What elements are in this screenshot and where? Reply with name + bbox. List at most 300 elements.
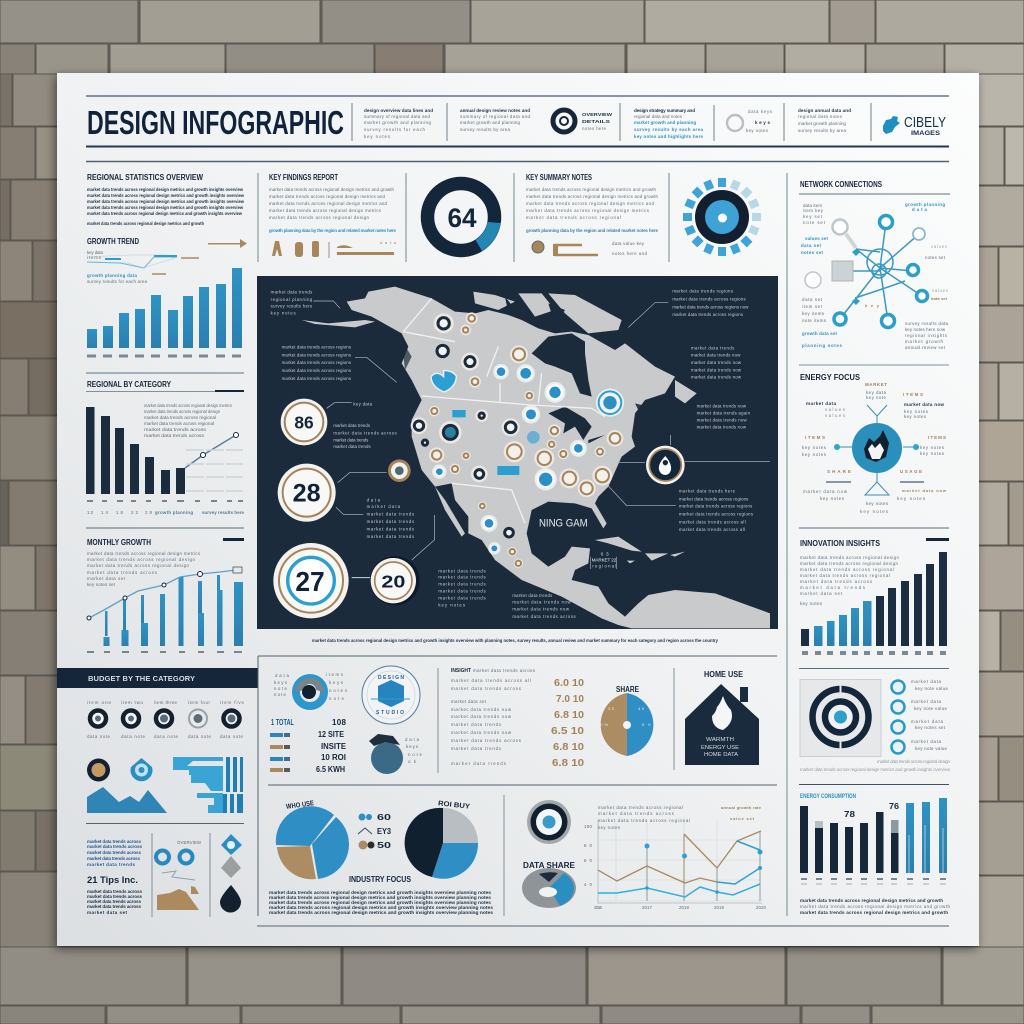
panel: lower left: OVERVIEW — [177, 840, 202, 845]
line chart: value set — [730, 816, 755, 821]
map text: caribbean label — [591, 551, 617, 569]
panel: lower left: market data trends across — [87, 844, 142, 849]
line chart: 2018 — [679, 905, 690, 910]
network labels: key items — [802, 311, 825, 316]
hub labels: key data — [866, 390, 887, 395]
network labels: note set — [803, 220, 826, 225]
panel: dark bar chart with trend: 22 — [131, 510, 139, 515]
lower text block: market data trends across regional design metrics and growth insights overview planning notes — [269, 900, 491, 905]
half pie — [596, 685, 658, 756]
icon: header target — [553, 110, 575, 132]
half pie: 30 — [608, 706, 615, 711]
chart scribble — [162, 871, 195, 880]
panel: dark bar chart with trend: market data trends across regional design metrics — [144, 403, 233, 408]
callout text top right: market data trends across regions — [672, 312, 743, 317]
panel: bottom right bars: market data trends across regional design metrics and growth — [800, 904, 951, 909]
panel: top text 2: growth planning data by the region and related market notes here — [526, 228, 659, 233]
ball icon: keys — [406, 744, 419, 749]
header text block 3: key notes and highlights here — [634, 134, 704, 139]
header text block 2: market growth and planning — [460, 120, 521, 125]
line chart: 2016 — [594, 905, 603, 910]
header text block 1: design overview data lines and — [364, 108, 433, 113]
panel: lower left: market data trends across — [87, 889, 142, 894]
panel: dark bar chart with trend: market data trends across — [144, 433, 205, 438]
panel: lower left: market data set — [87, 910, 127, 915]
pie legend: 50 — [377, 841, 392, 850]
panel: top text 1 — [258, 173, 406, 262]
header text block 4 — [798, 108, 851, 133]
callout text center left: market data — [367, 504, 401, 509]
map text: caribbean label: regional — [592, 563, 616, 568]
panel: dark bar chart with trend: market data trends across — [144, 427, 207, 432]
header text block 1: market growth and planning — [364, 120, 432, 125]
callout text top left: regional planning — [271, 297, 313, 302]
caption under map: market data trends across regional design metrics and growth insights overview with planning notes, survey results, annual review and market summary for each category and region across the country — [312, 638, 718, 644]
stamp badge: STUDIO — [376, 710, 404, 716]
callout text center left — [367, 497, 414, 539]
donut with labels: note — [274, 692, 287, 697]
panel: growth bars: INNOVATION INSIGHTS — [800, 539, 881, 548]
text column: market data trends across — [473, 668, 536, 673]
mini line chart: growth planning data — [87, 273, 138, 278]
logo — [883, 114, 946, 137]
donut with labels — [274, 672, 348, 706]
house icon — [685, 670, 759, 765]
panel: top text 2: KEY SUMMARY NOTES — [526, 173, 592, 182]
donut with labels: keys — [329, 680, 344, 685]
body text: market data trends across regional design metrics and growth — [87, 221, 204, 226]
bars — [800, 806, 898, 873]
stats table: 10 ROI — [321, 753, 346, 762]
hub labels: key note — [866, 395, 887, 400]
network labels: market growth — [905, 339, 944, 344]
panel: icon row: data note — [220, 734, 244, 739]
stat circle: 20 — [370, 556, 420, 605]
panel: icon row: item three — [154, 700, 178, 705]
panel: network diagram — [787, 173, 950, 916]
callout text bottom left: market data trends — [438, 575, 486, 580]
map badges: tan — [431, 315, 620, 566]
header text block 3: market growth and planning — [634, 120, 696, 125]
text column: INSIGHT — [451, 668, 472, 674]
lower text block: market data trends across regional design metrics and growth insights overview planning notes — [269, 905, 493, 910]
panel: dark bar chart with trend: growth planning — [155, 510, 193, 515]
map text: ocean label: NING GAM — [539, 518, 588, 530]
hub labels: market data now — [803, 489, 848, 494]
network labels: data set — [931, 296, 948, 301]
callout text bottom middle: market data trends across — [512, 614, 576, 619]
ball icon: data — [405, 737, 420, 742]
text column: market data set — [451, 699, 487, 704]
panel: growth bars: market data set — [800, 591, 843, 596]
house icon: ENERGY USE — [701, 745, 740, 751]
panel: dark bar chart with trend — [86, 373, 245, 515]
panel: top text 1: market data trends across regional design metrics — [269, 208, 382, 213]
panel: target — [799, 668, 951, 772]
hub labels: ITEMS — [805, 435, 825, 440]
header text block 4: design annual data and — [798, 108, 851, 113]
map marker: blue shield — [431, 371, 456, 392]
lower text block — [269, 890, 493, 915]
header icon label: OVERVIEW — [582, 112, 613, 117]
panel: icon row: item two — [121, 700, 144, 705]
line chart: 60 — [584, 858, 593, 863]
network links — [840, 222, 922, 321]
line chart: 100 — [584, 824, 593, 829]
text column: market data trends — [451, 722, 502, 727]
text column: market data trends across — [451, 686, 522, 691]
pie legend — [358, 813, 392, 850]
line chart: market data trends across — [598, 811, 675, 816]
map marker: blue labels — [452, 410, 540, 475]
callout text right lower: market data trends across all — [679, 527, 745, 532]
bar chart — [87, 268, 242, 348]
hub labels: key notes — [802, 452, 827, 457]
panel: blue columns with line: MONTHLY GROWTH — [87, 538, 151, 547]
line chart: 2017 — [642, 905, 653, 910]
panel: dark bar chart with trend: 28 — [145, 510, 153, 515]
panel: top left text and bar chart: GROWTH TREND — [87, 237, 139, 246]
map badge halos — [411, 312, 623, 568]
spokes — [838, 405, 916, 495]
panel: dark bar chart with trend: 12 — [87, 510, 94, 515]
network labels: notes set — [801, 250, 824, 255]
callout text right middle: market data trends now — [697, 403, 747, 408]
hub labels: ITEMS — [903, 392, 923, 397]
network labels: key — [865, 303, 880, 308]
callout text right upper: market data trends now — [691, 360, 742, 365]
map badges: blue — [433, 365, 586, 553]
tan figures: 6.0 10 — [554, 678, 584, 689]
panel: lower left: market data trends across — [87, 850, 141, 855]
half pie: 40 — [638, 706, 645, 711]
trend line — [185, 432, 238, 468]
mini line chart: key data — [87, 250, 104, 255]
panel: top text 2: market data trends across regional design metrics and growth — [526, 194, 659, 199]
network nodes — [834, 216, 928, 328]
icon: gray drop — [221, 856, 241, 878]
panel: top text 2 — [514, 173, 669, 262]
half pie: SHARE — [616, 685, 640, 694]
network labels: annual review set — [905, 345, 946, 350]
map marker: large blue target — [596, 389, 624, 417]
body text: market data trends across regional design metrics and growth insights overview — [87, 193, 244, 198]
header text block 4: regional data notes — [798, 114, 843, 119]
panel: bottom right bars: 76 — [889, 802, 900, 811]
panel: dark bar chart with trend: 18 — [116, 510, 124, 515]
columns — [104, 575, 243, 646]
line chart: annual growth rate — [721, 805, 762, 810]
hub labels: key notes — [866, 501, 889, 506]
panel: bottom right bars: 78 — [844, 810, 856, 819]
line chart — [584, 805, 767, 910]
hub labels: market data now — [904, 402, 944, 407]
icon: blue diamond — [221, 834, 242, 855]
hudson bay and lakes — [402, 297, 662, 533]
borders — [403, 298, 605, 523]
text column: market data trends across all — [451, 678, 531, 683]
mini line chart: items — [87, 255, 102, 260]
panel: growth bars: market data trends — [800, 585, 866, 590]
drop icon — [130, 758, 152, 781]
stats table: 6.5 KWH — [316, 765, 345, 774]
panel: dark bar chart with trend: market data trends across regional — [144, 421, 214, 426]
header text block 3: survey results by each area — [634, 127, 704, 132]
callout text top left: market data trends — [271, 289, 312, 294]
panel: network diagram: NETWORK CONNECTIONS — [800, 180, 883, 189]
header text block 1: key notes — [364, 134, 391, 139]
network labels: key set — [803, 214, 823, 219]
panel: target: market data trends across regional design — [877, 759, 951, 764]
network labels: item key — [803, 208, 824, 213]
tan series — [598, 831, 761, 883]
panel: top text 1: data — [380, 240, 397, 245]
callout text bottom left: market data trends — [438, 568, 486, 573]
network labels: survey results data — [905, 321, 949, 326]
panel: blue columns with line: market data trends across regional design — [87, 563, 190, 568]
callout text left middle: key data — [353, 402, 373, 407]
panel: blue columns with line: market data trends across — [87, 570, 158, 575]
panel: lower left: market data trends across — [87, 894, 142, 899]
network labels: note items — [802, 318, 827, 323]
callout text center left: market data trends — [367, 534, 414, 539]
header text block 3: regional data and notes — [634, 114, 683, 119]
network labels: values — [931, 244, 948, 249]
panel: flame hub diagram: ENERGY FOCUS — [800, 373, 861, 382]
hub labels: key notes — [860, 509, 889, 514]
panel: icon row — [87, 700, 245, 813]
panel: lower left: market data trends across — [87, 839, 141, 844]
panel: top text 1: growth planning data by the region and related market notes here — [269, 228, 397, 233]
panel: icon row: item four — [188, 700, 211, 705]
stat circle: 20: 20 — [381, 571, 405, 591]
hub labels: values — [825, 413, 846, 418]
panel: top left text and bar chart — [87, 173, 247, 356]
panel: top text 1: KEY FINDINGS REPORT — [269, 173, 338, 182]
target icon — [812, 684, 868, 750]
header text block 3 — [634, 108, 704, 139]
map text: caribbean label: MARKET 22 — [592, 558, 617, 563]
map badges: dark — [414, 318, 516, 537]
line chart: key notes — [598, 825, 621, 830]
panel: target: key note value — [915, 746, 948, 751]
icon: header gray ring — [727, 109, 773, 133]
network labels: data — [912, 207, 928, 212]
callout text bottom left: key notes — [438, 602, 465, 607]
text column: market data trends now — [451, 707, 512, 712]
bars — [801, 552, 947, 646]
panel: lower left: market data trends across — [87, 899, 141, 904]
panel: target: key note value — [915, 686, 949, 691]
line chart: 40 — [584, 882, 593, 887]
pie chart: left — [276, 800, 349, 879]
callout text left upper: market data trends across regions — [282, 360, 351, 365]
text column: market data trends across — [451, 738, 522, 743]
stat circle: 28 — [278, 464, 336, 522]
line — [87, 567, 242, 620]
drop marker — [646, 446, 685, 484]
callout text left middle: market data trends — [333, 423, 370, 428]
mini line chart: survey results for each area — [87, 279, 148, 284]
callout text right lower: market data trends across all — [679, 519, 746, 524]
pie chart: right — [405, 800, 478, 879]
map text: caribbean label: 63 — [601, 551, 609, 557]
banner: BUDGET BY THE CATEGORY — [88, 674, 195, 683]
network labels: planning notes — [802, 343, 843, 348]
panel: flame hub diagram — [799, 365, 949, 514]
panel: map — [257, 276, 778, 629]
callout text right upper: market data trends — [691, 346, 734, 351]
stats table: 12 SITE — [318, 730, 345, 739]
pie legend: EY3 — [377, 827, 392, 836]
stat circle: 27: 27 — [295, 566, 325, 597]
callout text center left: market data trends — [367, 527, 414, 532]
panel: icon row: data note — [188, 734, 212, 739]
panel: target: market data trends across regional design metrics and growth insights overview — [800, 767, 951, 772]
body text: market data trends across regional design metrics and growth insights overview — [87, 205, 243, 210]
mountain chart — [87, 787, 167, 813]
panel: icon row: data note — [121, 734, 146, 739]
panel: lower left: 21 Tips Inc. — [87, 875, 138, 885]
callout text right middle: market data trends again — [697, 411, 751, 416]
donut with labels: items — [326, 672, 344, 677]
callout text left middle: market data trends across — [333, 431, 397, 436]
icon: tan tools — [532, 241, 648, 256]
hub labels: key notes — [920, 445, 945, 450]
house icon: WARMTH — [706, 737, 734, 743]
panel: icon row: item one — [87, 700, 112, 705]
callout text right middle — [697, 403, 751, 430]
panel: target: market data — [911, 719, 944, 724]
panel: center frame — [257, 656, 949, 926]
ball icon — [369, 734, 423, 774]
tan figures: 6.8 10 — [552, 758, 584, 769]
header text block 1: summary of regional data and — [364, 114, 431, 119]
panel: growth bars: market data trends across regional design — [800, 555, 900, 560]
connectors — [327, 402, 770, 560]
stamp badge: DESIGN — [378, 675, 404, 681]
title: DESIGN INFOGRAPHIC — [87, 104, 344, 141]
callout text top left: survey results here — [271, 303, 313, 308]
tan figures: 6.8 10 — [554, 710, 584, 721]
panel: dark bar chart with trend: REGIONAL BY CATEGORY — [87, 380, 172, 389]
logo: IMAGES — [911, 130, 941, 137]
lower text block: market data trends across regional design metrics and growth insights overview planning notes — [269, 895, 491, 900]
callout text right lower: market data trends here — [679, 488, 736, 493]
radial sunburst icon — [683, 178, 761, 256]
panel: lower left — [86, 824, 244, 917]
callout text left middle: market data trends — [333, 444, 371, 449]
pie chart: right: ROI BUY — [438, 800, 471, 811]
callout text top left: key notes — [271, 311, 296, 316]
callout text top right: market data trends across regions now — [672, 304, 749, 309]
header text block 3: design strategy summary and — [634, 108, 695, 113]
hub labels: key notes — [904, 409, 929, 414]
house icon: HOME USE — [704, 670, 744, 679]
line chart: 80 — [584, 843, 593, 848]
panel: blue columns with line: market data trends across regional design — [87, 557, 196, 562]
donut with labels: keys — [274, 680, 288, 685]
small marker — [388, 459, 411, 482]
header band — [86, 96, 949, 162]
body text: market data trends across regional design metrics and growth insights overview — [87, 187, 243, 192]
panel: dark bar chart with trend: survey results here — [202, 510, 245, 515]
3d donut chart: DATA SHARE — [523, 861, 576, 870]
icon: tan figures — [272, 241, 319, 257]
striped bar chart — [173, 757, 243, 813]
callout text left upper: market data trends across regions — [282, 376, 351, 381]
donut with labels: data — [275, 673, 290, 678]
network labels — [801, 202, 949, 350]
donut with labels: note — [274, 686, 288, 691]
header text block 2: summary of regional data and — [460, 114, 531, 119]
pie legend: 60 — [377, 813, 392, 822]
hub labels: SHARE — [827, 469, 851, 474]
line chart: market data trends across regional — [598, 805, 683, 810]
blue series — [717, 841, 760, 884]
network labels: item set — [802, 304, 823, 309]
panel: target: market data — [911, 699, 942, 704]
stats table: 108 — [332, 718, 347, 727]
callout text top right: market data trends across regions — [672, 296, 746, 301]
stat circle: 27 — [273, 543, 349, 618]
callout text right lower — [608, 486, 753, 532]
lower text block: market data trends across regional design metrics and growth insights overview planning notes — [269, 910, 493, 915]
callout text top left — [271, 289, 340, 316]
header text block 4: market growth planning — [798, 121, 847, 126]
panel: bottom right bars: market data trends across regional design metrics and growth — [800, 910, 948, 915]
ball icon: ok — [408, 759, 417, 764]
panel: icon row: data note — [87, 734, 111, 739]
ring icon — [527, 800, 571, 844]
3d donut chart — [522, 861, 576, 908]
ring icons — [156, 850, 192, 864]
callout text right lower: market data trends across regions — [679, 496, 748, 501]
stat circle: 86 — [281, 399, 327, 445]
donut with labels: notes — [329, 688, 348, 693]
callout text bottom middle: market data trends — [512, 593, 552, 598]
callout text center left: market data trends — [367, 519, 414, 524]
network labels: growth data set — [802, 331, 838, 336]
donut: 64 percent: 64 — [448, 203, 476, 233]
donut: 64 percent — [428, 184, 500, 251]
panel: icon row: data note — [154, 734, 179, 739]
panel: dark bar chart with trend: market data trends across regional design — [144, 409, 221, 414]
callout text right middle: market data trends now — [697, 417, 748, 422]
header icon label: DETAILS — [582, 119, 610, 124]
callout text left upper: market data trends across regions — [282, 368, 351, 373]
panel: top text 1: market data trends across regional design metrics and growth — [269, 187, 395, 192]
panel: blue columns with line: key notes set — [87, 582, 116, 587]
panel: bottom right bars: ENERGY CONSUMPTION — [800, 793, 856, 800]
callout text right upper: market data trends now — [691, 353, 741, 358]
network labels: growth planning — [905, 202, 945, 207]
icon: header gray ring: keys — [755, 120, 770, 125]
header text block 1: survey results for each — [364, 127, 426, 132]
mini line chart — [87, 250, 199, 284]
icon: dark drop — [220, 885, 241, 912]
callout text center left: data — [367, 497, 381, 502]
panel: bottom right bars: market data trends across regional design metrics and growth — [800, 898, 943, 903]
panel: lower left: market data trends across — [87, 856, 140, 861]
stats table — [270, 718, 347, 774]
tan figures: 6.5 10 — [551, 726, 585, 737]
callout text bottom middle: market data trends now — [512, 607, 570, 612]
callout text right upper — [691, 346, 742, 380]
hub labels: key notes — [904, 414, 927, 419]
network labels: key notes here now — [905, 327, 946, 332]
network labels: values set — [805, 236, 829, 241]
